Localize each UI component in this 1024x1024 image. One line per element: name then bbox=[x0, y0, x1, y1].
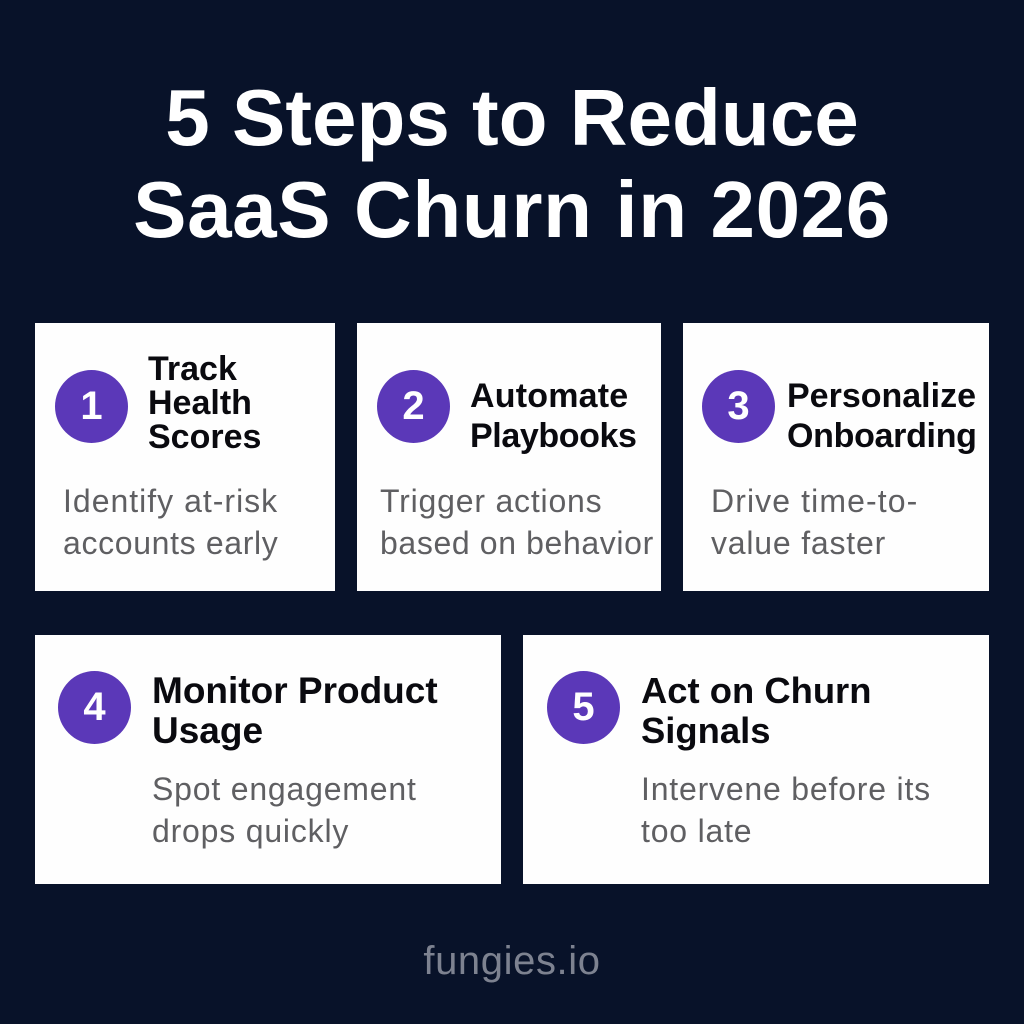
text: step 3: Drive time-to- bbox=[711, 483, 918, 519]
icon: number 5: 5 bbox=[572, 685, 595, 729]
text: step 5: too late bbox=[641, 813, 752, 849]
icon: number 2: 2 bbox=[402, 384, 425, 428]
heading: step 4 bbox=[152, 670, 438, 751]
text: step 5 bbox=[641, 771, 931, 849]
text: step 4: drops quickly bbox=[152, 813, 349, 849]
heading: step 2 bbox=[470, 377, 636, 455]
icon: number 4: 4 bbox=[83, 685, 106, 729]
heading: step 3: Onboarding bbox=[787, 417, 977, 455]
heading: step 5 bbox=[641, 670, 871, 751]
icon: number 1 bbox=[55, 370, 128, 443]
icon: number 5 bbox=[547, 671, 620, 744]
footer brand: fungies.io bbox=[423, 939, 601, 983]
panel: step 5 bbox=[523, 635, 989, 884]
text: step 3 bbox=[711, 483, 918, 561]
text: step 4: Spot engagement bbox=[152, 771, 417, 807]
heading: step 1: Track bbox=[148, 350, 237, 388]
icon: number 4 bbox=[58, 671, 131, 744]
text: step 1: accounts early bbox=[63, 525, 278, 561]
heading: step 4: Usage bbox=[152, 710, 263, 751]
text: step 2: Trigger actions bbox=[380, 483, 602, 519]
icon: number 2 bbox=[377, 370, 450, 443]
panel: step 2 bbox=[357, 323, 661, 591]
panel: step 1 bbox=[35, 323, 335, 591]
text: step 3: value faster bbox=[711, 525, 886, 561]
panel: step 3 bbox=[683, 323, 989, 591]
text: step 1 bbox=[63, 483, 278, 561]
title: SaaS Churn in 2026 bbox=[133, 165, 891, 254]
heading: step 4: Monitor Product bbox=[152, 670, 438, 711]
heading: step 1: Health bbox=[148, 384, 252, 422]
icon: number 1: 1 bbox=[80, 384, 103, 428]
heading: step 5: Signals bbox=[641, 710, 770, 751]
heading: step 1 bbox=[148, 350, 261, 456]
text: step 4 bbox=[152, 771, 417, 849]
icon: number 3: 3 bbox=[727, 384, 750, 428]
heading: step 1: Scores bbox=[148, 418, 261, 456]
heading: step 3 bbox=[787, 377, 977, 455]
title bbox=[133, 73, 891, 254]
text: step 2 bbox=[380, 483, 654, 561]
title: 5 Steps to Reduce bbox=[165, 73, 859, 162]
heading: step 3: Personalize bbox=[787, 377, 976, 415]
heading: step 2: Automate bbox=[470, 377, 628, 415]
icon: number 3 bbox=[702, 370, 775, 443]
heading: step 5: Act on Churn bbox=[641, 670, 871, 711]
text: step 5: Intervene before its bbox=[641, 771, 931, 807]
text: step 2: based on behavior bbox=[380, 525, 654, 561]
text: step 1: Identify at-risk bbox=[63, 483, 278, 519]
heading: step 2: Playbooks bbox=[470, 417, 636, 455]
panel: step 4 bbox=[35, 635, 501, 884]
